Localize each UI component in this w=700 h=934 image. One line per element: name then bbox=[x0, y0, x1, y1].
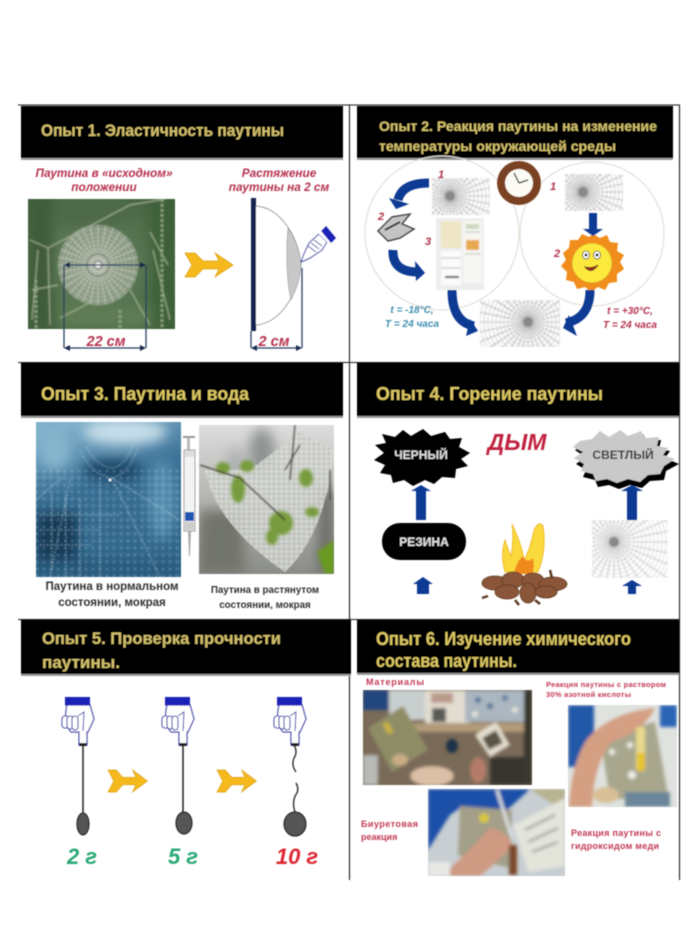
pill: rubber bbox=[382, 523, 466, 560]
arrow: yellow second bbox=[217, 770, 256, 792]
label: biuret reaction bbox=[361, 819, 418, 842]
label: 5 g: 5 г bbox=[168, 844, 198, 869]
table grid lines bbox=[18, 105, 680, 880]
caption: initial position: Паутина в «исходном» bbox=[35, 166, 173, 180]
diagram: stretched web with hand bbox=[251, 198, 336, 331]
photo: biuret reaction bbox=[428, 789, 565, 876]
label: nitric acid reaction: Реакция паутины с раствором bbox=[546, 680, 666, 689]
panel: experiment 4 bbox=[357, 363, 684, 612]
label: warm conditions: t = +30°C, bbox=[607, 306, 653, 317]
step numbers: 1 bbox=[550, 181, 556, 193]
icon: campfire bbox=[482, 524, 567, 605]
label: 10 g: 10 г bbox=[276, 844, 318, 869]
panel: experiment 2 bbox=[357, 106, 673, 392]
caption: initial position bbox=[35, 166, 173, 194]
dimension: 22 cm bbox=[64, 262, 146, 351]
step numbers: 1 bbox=[438, 169, 444, 181]
panel: experiment 1 bbox=[21, 106, 343, 351]
hanging weight: 2 g bbox=[62, 697, 94, 835]
web image: heat step 1 bbox=[564, 174, 624, 212]
label: materials: Материалы bbox=[366, 677, 424, 687]
header: experiment 1: Опыт 1. Эластичность паутины bbox=[41, 121, 284, 140]
caption: normal wet bbox=[46, 581, 178, 609]
label: cold conditions: t = -18°C, bbox=[390, 305, 434, 316]
burst: black smoke bbox=[374, 429, 470, 486]
icon: folder holder bbox=[378, 214, 414, 241]
label: copper hydroxide reaction: гидроксидом меди bbox=[571, 841, 659, 851]
burst: light smoke: СВЕТЛЫЙ bbox=[592, 447, 654, 462]
burst: light smoke bbox=[573, 430, 679, 489]
label: cold conditions bbox=[385, 305, 439, 330]
header: experiment 3: Опыт 3. Паутина и вода bbox=[41, 384, 250, 404]
icon: syringe bbox=[183, 436, 195, 556]
caption: stretching: Растяжение bbox=[242, 166, 317, 180]
step numbers: 2 bbox=[377, 211, 384, 223]
panel: experiment 5 bbox=[21, 620, 351, 869]
header: experiment 2 bbox=[357, 106, 673, 160]
caption: initial position: положении bbox=[71, 180, 137, 194]
header: experiment 2: Опыт 2. Реакция паутины на изменение bbox=[379, 118, 657, 134]
arrows: up to smoke bbox=[411, 485, 643, 594]
label: biuret reaction: реакция bbox=[361, 832, 397, 842]
caption: normal wet: состоянии, мокрая bbox=[58, 597, 166, 609]
label: smoke: ДЫМ bbox=[486, 429, 547, 455]
dimension: 22 cm: 22 см bbox=[86, 334, 126, 350]
infographic canvas bbox=[17, 104, 681, 881]
header: experiment 1 bbox=[21, 106, 343, 160]
panel: experiment 3 bbox=[21, 363, 343, 611]
photo: stretched wet web bbox=[199, 425, 334, 574]
photo: spider web in nature bbox=[28, 195, 175, 335]
caption: stretching bbox=[229, 166, 329, 194]
header: experiment 6 bbox=[357, 620, 679, 675]
caption: stretching: паутины на 2 см bbox=[229, 180, 329, 194]
label: copper hydroxide reaction: Реакция паутины с bbox=[571, 828, 661, 838]
label: cold conditions: T = 24 часа bbox=[385, 319, 439, 330]
dimension: 2 cm bbox=[251, 268, 302, 351]
icon: smiling sun bbox=[561, 234, 624, 292]
cycle circles bbox=[365, 156, 664, 310]
label: copper hydroxide reaction bbox=[571, 828, 661, 851]
header: experiment 4: Опыт 4. Горение паутины bbox=[376, 384, 603, 404]
label: 2 g: 2 г bbox=[66, 844, 97, 869]
label: biuret reaction: Биуретовая bbox=[361, 819, 418, 829]
header: experiment 2: температуры окружающей среды bbox=[379, 138, 616, 154]
icon: clock bbox=[497, 161, 541, 205]
icon: refrigerator bbox=[436, 218, 484, 290]
header: experiment 6: Опыт 6. Изучение химического bbox=[376, 629, 631, 649]
burst: black smoke: ЧЕРНЫЙ bbox=[394, 447, 448, 462]
header: experiment 6: состава паутины. bbox=[376, 651, 517, 671]
label: warm conditions bbox=[603, 306, 657, 331]
step numbers bbox=[377, 169, 560, 260]
header: experiment 4 bbox=[357, 363, 679, 418]
header: experiment 3 bbox=[21, 363, 343, 418]
arrows: blue process arrows bbox=[389, 183, 603, 336]
caption: stretched wet: Паутина в растянутом bbox=[211, 585, 319, 596]
step numbers: 2 bbox=[553, 248, 560, 260]
dimension: 2 cm: 2 см bbox=[258, 334, 290, 350]
step numbers: 3 bbox=[425, 236, 431, 248]
header: experiment 5: паутины. bbox=[42, 653, 120, 672]
web image: cold step 1 bbox=[432, 178, 490, 216]
hanging weight: 10 g broken bbox=[274, 697, 306, 836]
header: experiment 5 bbox=[21, 620, 351, 676]
caption: stretched wet: состоянии, мокрая bbox=[219, 600, 311, 611]
panel: experiment 6 bbox=[357, 620, 679, 876]
photo: nitric acid test bbox=[568, 705, 677, 807]
caption: normal wet: Паутина в нормальном bbox=[46, 581, 178, 593]
photo: materials on table bbox=[363, 690, 532, 786]
label: warm conditions: T = 24 часа bbox=[603, 320, 657, 331]
label: nitric acid reaction: 30% азотной кислоты bbox=[546, 690, 631, 699]
caption: stretched wet bbox=[211, 585, 319, 611]
web image: result bbox=[480, 300, 560, 348]
hanging weight: 5 g bbox=[162, 697, 194, 834]
photo: wet web, blue bbox=[36, 419, 181, 577]
arrow: yellow bbox=[185, 253, 233, 277]
label: nitric acid reaction bbox=[546, 680, 666, 699]
pill: rubber: РЕЗИНА bbox=[399, 535, 449, 549]
arrow: yellow first bbox=[108, 770, 147, 792]
header: experiment 5: Опыт 5. Проверка прочности bbox=[42, 629, 281, 648]
web image: burning sample bbox=[592, 519, 668, 578]
